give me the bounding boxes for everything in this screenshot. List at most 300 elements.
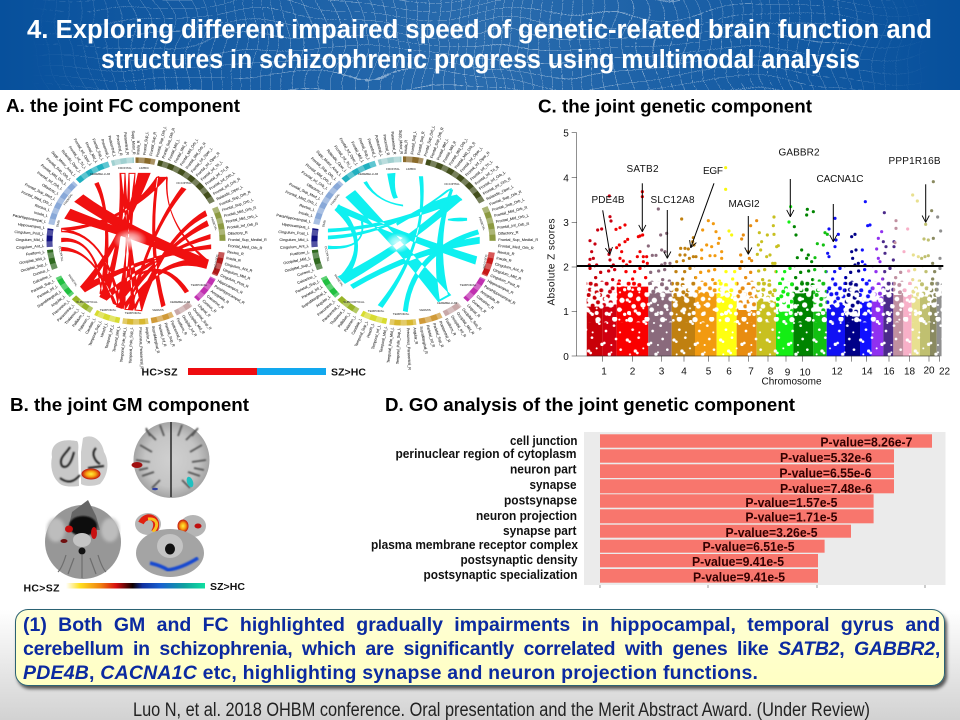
region labels left: Frontal_Mid_L [84, 142, 98, 164]
y axis ticks: 4 [563, 174, 569, 184]
region labels right: Temporal_Pole_Sup_L [396, 328, 401, 364]
region labels left: Frontal_Inf_Orb_L [36, 171, 63, 191]
gene labels: SATB2 [626, 164, 659, 175]
region labels left: Temporal_Inf_L [104, 324, 115, 349]
region labels right: Frontal_Sup_L [410, 131, 417, 155]
region labels right: Fusiform_R [444, 318, 457, 336]
region labels left: Olfactory_L [41, 183, 60, 196]
region labels left: Supp_Motor_R [131, 131, 136, 155]
region labels left: Frontal_Inf_Orb_R [227, 222, 259, 230]
red chords [62, 173, 211, 311]
GM colour bar: HC>SZ [24, 582, 60, 594]
gene arrows [603, 179, 926, 258]
region labels left: SupraMarginal_R [151, 326, 160, 354]
module names left: OCCIPITAL [58, 246, 64, 262]
region labels right: Hippocampus_L [282, 222, 310, 230]
module names right: DMN [321, 220, 327, 228]
region labels right: Occipital_Sup_R [461, 308, 482, 331]
region labels right: Paracentral_L [321, 304, 341, 323]
center glow left [113, 229, 147, 251]
module names left: CEREBELLUM [170, 300, 191, 304]
region labels right: Frontal_Mid_L [350, 141, 365, 163]
plot background [584, 432, 946, 585]
p-value labels: P-value=5.32e-6 [780, 450, 872, 465]
region labels right: Frontal_Sup_Orb_R [489, 190, 523, 207]
region labels left: Rectus_L [34, 204, 51, 212]
footer background gradient [0, 610, 960, 720]
module names right: TEMPORAL [393, 312, 410, 316]
gene labels: EGF [703, 166, 723, 177]
region labels right: Frontal_Mid_Orb_L [496, 214, 529, 224]
gene labels: SLC12A8 [650, 195, 695, 206]
region labels left: Frontal_Inf_Oper_L [73, 138, 93, 167]
region labels right: Cingulum_Ant_R [494, 262, 524, 273]
region labels right: Frontal_Sup_Med_L [288, 182, 321, 201]
region labels left: Cingulum_Post_R [220, 274, 249, 289]
region labels right: Frontal_Inf_Oper_L [338, 137, 359, 166]
region labels left: Cingulum_Mid_L [16, 238, 44, 242]
callout: conclusion [15, 609, 945, 686]
Manhattan plot [546, 128, 950, 388]
region labels left: Frontal_Mid_R [174, 141, 188, 164]
x axis ticks: 16 [883, 366, 895, 378]
region labels left: Frontal_Inf_Orb_L [209, 171, 236, 191]
region labels left: Postcentral_L [107, 135, 117, 157]
region labels right: Precentral_L [366, 138, 377, 159]
category labels: postsynaptic specialization [424, 568, 578, 582]
GO bar chart [371, 432, 946, 588]
module names right: FRONTAL [386, 167, 400, 171]
region labels right: Precuneus_Paracentral_R [406, 328, 412, 370]
slice: coronal [51, 436, 107, 487]
p-value labels: P-value=6.51e-5 [702, 539, 794, 554]
module names right: LIMBIC [406, 167, 417, 171]
region labels left: Occipital_Sup_R [192, 307, 213, 331]
region labels right: Paracentral_R [390, 131, 397, 155]
x axis ticks: 14 [861, 366, 873, 378]
region labels right: Occipital_Mid_L [283, 256, 311, 265]
module names right: PARIETAL [478, 216, 486, 231]
region labels left: Temporal_Pole_Mid_L [119, 327, 127, 362]
region labels right: Fusiform_L [290, 250, 310, 257]
region labels right: Frontal_Inf_Tri_R [474, 165, 500, 186]
region labels right: Frontal_Sup_Orb_L [491, 198, 525, 212]
brain slices [45, 422, 210, 579]
y axis ticks: 0 [563, 352, 569, 363]
region labels right: Frontal_Sup_Orb_L [423, 125, 436, 157]
slice: temporal and cerebellum [135, 513, 206, 577]
FC legend [142, 366, 366, 378]
axes [572, 133, 939, 362]
region labels left: Frontal_Med_Orb_L [21, 190, 53, 207]
region labels left: Frontal_Mid_Orb_L [40, 163, 68, 186]
region labels right: Putamen_L [343, 315, 357, 333]
region labels left: Frontal_Inf_Oper_R [195, 151, 221, 177]
module names left: TEMPORAL [191, 283, 208, 287]
region labels right: Precuneus_L [317, 299, 336, 317]
region labels left: Insula_L [34, 211, 48, 218]
module names right: CEREBELLUM [358, 172, 379, 176]
module names left: SUBCORTICAL [76, 300, 98, 304]
x axis ticks: 18 [904, 366, 915, 378]
region labels left: Temporal_Mid_L [112, 326, 121, 352]
cyan chords [328, 173, 479, 312]
region labels right: Rolandic_Oper_L [326, 149, 348, 173]
region labels left: ParaHippocampal_R [213, 284, 246, 305]
category labels: cell junction [510, 434, 578, 448]
region labels left: Temporal_Pole_Sup_L [128, 327, 134, 363]
p-value labels: P-value=1.57e-5 [745, 495, 837, 510]
category labels: plasma membrane receptor complex [371, 538, 578, 552]
heading C: C. the joint genetic component [538, 96, 812, 116]
title: 4. Exploring different impaired speed of genetic-related brain function and [27, 16, 932, 44]
p-value labels: P-value=3.26e-5 [726, 525, 818, 540]
y axis ticks: 3 [563, 218, 569, 229]
region labels left: Precuneus_Paracentral_R [138, 327, 144, 369]
region labels right: Cuneus_R [471, 299, 487, 314]
p-value labels: P-value=6.55e-6 [779, 466, 871, 480]
region labels left: Parietal_Inf_L [37, 284, 59, 299]
region labels left: Precentral_L [100, 139, 111, 159]
region labels right: Cingulum_Post_L [278, 230, 309, 236]
region labels left: Frontal_Mid_Orb_L [225, 214, 258, 224]
region labels left: Angular_L [50, 294, 66, 308]
y axis ticks: 2 [563, 262, 569, 274]
region labels right: Frontal_Sup_Orb_L [310, 157, 338, 181]
region labels right: Rectus_R [497, 250, 515, 256]
region labels left: Frontal_Sup_Orb_L [45, 157, 72, 182]
region labels right: Thalamus_L [329, 308, 346, 326]
module names right: PARIETAL [333, 274, 345, 288]
region labels left: Parietal_Inf_R [157, 324, 167, 347]
GM colour bar: SZ>HC [210, 581, 245, 593]
region labels left: Frontal_Med_Orb_R [228, 244, 263, 250]
region labels right: Olfactory_R [498, 231, 519, 236]
x axis ticks: 7 [748, 366, 754, 378]
x axis ticks: 22 [939, 366, 950, 378]
region labels right: Angular_R [412, 327, 418, 345]
region labels left: Frontal_Sup_R [149, 131, 157, 156]
region labels right: Frontal_Sup_R [417, 131, 426, 156]
threshold line [577, 263, 943, 269]
module names right: TEMPORAL [460, 283, 477, 287]
heading B: B. the joint GM component [10, 394, 249, 415]
region labels right: ParaHippocampal_L [276, 213, 311, 224]
region labels right: Hippocampus_R [487, 279, 514, 295]
region labels right: Calcarine_R [475, 295, 495, 310]
region labels left: Fusiform_R [175, 317, 188, 336]
region labels right: Olfactory_L [306, 183, 325, 196]
region labels right: Frontal_Sup_L [357, 138, 371, 161]
y axis title: Absolute Z scores [546, 218, 558, 306]
region labels left: Cingulum_Post_L [14, 230, 44, 236]
region labels left: Frontal_Inf_Tri_R [204, 165, 230, 186]
region labels left: Frontal_Inf_Tri_L [68, 145, 87, 170]
region labels right: Postcentral_R [438, 321, 451, 343]
region labels left: Frontal_Sup_Orb_L [155, 126, 167, 157]
module names right: SUB-CORT [482, 254, 488, 270]
region labels left: Frontal_Inf_Orb_R [212, 177, 241, 196]
p-value labels [692, 434, 912, 584]
region labels left: Frontal_Sup_Medial_R [228, 238, 267, 242]
callout: conclusion: cerebellum in schizophrenia, which are significantly correlated with genes like SATB2, GABBR2, [23, 638, 940, 660]
region labels right: Angular_L [315, 295, 332, 308]
gene labels: PDE4B [592, 195, 625, 206]
region labels left: Rectus_R [227, 250, 244, 256]
module ring left [50, 160, 222, 322]
region labels left: Frontal_Inf_Oper_L [190, 147, 214, 173]
module ring right [314, 159, 493, 323]
region labels left: ParaHippocampal_L [12, 213, 47, 224]
region labels right: Supp_Motor_Area_L [315, 150, 342, 177]
region labels right: Frontal_Inf_Tri_L [469, 160, 494, 181]
region labels left: Insula_R [226, 256, 242, 263]
y axis ticks [563, 128, 569, 363]
region labels right: Frontal_Mid_Orb_L [448, 138, 469, 166]
region labels left: Rolandic_Oper_L [60, 149, 82, 173]
region labels right: Frontal_Mid_Orb_L [304, 163, 333, 186]
region labels left: Cuneus_L [32, 268, 50, 277]
module names left: OCCIPITAL [176, 181, 192, 185]
callout: conclusion: (1) Both GM and FC highlighted gradually impairments in hippocampal, temporal gyrus and [23, 614, 940, 636]
region labels left: Rolandic_Oper_L [216, 185, 244, 201]
region labels left: Occipital_Mid_R [187, 311, 206, 335]
region labels right: ParaHippocampal_R [483, 285, 516, 306]
region labels left: Frontal_Mid_L [168, 139, 180, 161]
region labels right: Frontal_Med_Orb_R [498, 244, 534, 250]
region labels left: Angular_R [145, 327, 151, 344]
module names right: SUBCORTICAL [343, 300, 365, 304]
x axis ticks: 6 [726, 366, 732, 378]
category labels: neuron part [510, 462, 577, 476]
region labels left: Hippocampus_R [217, 279, 244, 295]
y axis ticks: 5 [563, 128, 569, 140]
region labels left [12, 126, 267, 369]
region labels left: Frontal_Mid_Orb_R [224, 206, 257, 218]
region labels left: Supp_Motor_Area_L [50, 150, 77, 177]
region labels right: SupraMarginal_R [419, 326, 428, 355]
region labels right: Pallidum_L [337, 311, 351, 328]
region labels right: Parietal_Inf_L [301, 285, 324, 300]
region labels right: SupraMarginal_L [301, 290, 327, 309]
module names right: CEREBELLUM [437, 301, 458, 305]
category labels [371, 434, 578, 582]
region labels right: Postcentral_L [374, 135, 384, 157]
x axis ticks [601, 366, 950, 378]
module names left: TEMPORAL [100, 308, 117, 312]
region labels right: Cingulum_Post_R [490, 274, 520, 289]
category labels: postsynaptic density [460, 553, 578, 567]
region labels left: Fusiform_L [26, 250, 45, 256]
category labels: perinuclear region of cytoplasm [396, 447, 576, 461]
region labels left: Frontal_Sup_L [143, 131, 149, 155]
x axis ticks: 10 [799, 368, 811, 378]
region labels right: Frontal_Mid_Orb_R [494, 206, 528, 218]
x axis ticks: 2 [630, 366, 636, 378]
region labels right: Temporal_Mid_L [379, 326, 388, 353]
p-value labels: P-value=1.71e-5 [745, 510, 837, 524]
p-value labels: P-value=7.48e-6 [780, 481, 872, 496]
region labels right: Rolandic_Oper_L [486, 185, 515, 201]
region labels left: Insula_R [136, 140, 141, 155]
region labels right: Frontal_Sup_Orb_R [430, 127, 445, 159]
region labels right: Rectus_L [299, 203, 316, 212]
module names right: FRONTAL [330, 192, 341, 206]
gene labels: GABBR2 [778, 148, 820, 158]
region labels right: Precentral_R [382, 134, 390, 156]
x axis ticks: 3 [659, 366, 665, 378]
region labels right: Parietal_Inf_R [425, 325, 436, 348]
region labels right: Frontal_Inf_Oper_R [465, 151, 491, 177]
region labels left: Precuneus_L [52, 299, 71, 316]
FC legend: HC>SZ [142, 366, 178, 378]
gene labels [592, 148, 941, 210]
region labels left: Frontal_Sup_Orb_L [221, 198, 254, 212]
region labels left: Hippocampus_L [18, 223, 45, 230]
region labels right: Cingulum_Mid_R [492, 268, 522, 281]
module names left: TEMPORAL [125, 311, 142, 315]
region labels left: Cingulum_Mid_R [222, 268, 251, 281]
region labels right: Frontal_Med_Orb_L [285, 190, 318, 207]
module names left: FRONTAL [63, 192, 74, 206]
module names right: TEMPORAL [368, 309, 385, 313]
region labels left: Frontal_Mid_Orb_L [179, 138, 199, 167]
p-value labels: P-value=9.41e-5 [692, 554, 784, 569]
module names left [55, 166, 219, 315]
region labels left: Paracentral_L [56, 303, 75, 322]
region labels left: Amygdala_R [210, 289, 230, 305]
region labels right: Insula_R [496, 256, 512, 263]
heading A: A. the joint FC component [6, 95, 240, 116]
category labels: synapse part [503, 524, 577, 538]
region labels right: Frontal_Inf_Orb_L [478, 170, 506, 191]
y axis ticks: 1 [563, 307, 569, 318]
region labels left: Occipital_Inf_R [181, 314, 198, 338]
region labels right: Temporal_Sup_L [354, 321, 369, 347]
header banner [0, 0, 960, 90]
region labels left: SupraMarginal_L [36, 289, 62, 309]
region labels right: Caudate_L [351, 318, 363, 335]
gene labels: PPP1R16B [888, 156, 941, 167]
module names left: CEREBELLUM [90, 172, 111, 176]
significant points [589, 168, 941, 267]
region labels left: Postcentral_R [170, 320, 182, 343]
module names left: FRONTAL [118, 166, 132, 170]
region labels right: Insula_L [298, 211, 313, 218]
x axis ticks: 9 [785, 368, 791, 378]
region labels right: Supp_Motor_R [398, 130, 403, 154]
module names right: OCCIPITAL [324, 246, 330, 262]
x axis ticks: 1 [601, 366, 607, 378]
region labels right: Insula_R [404, 140, 408, 154]
panel A right: SZ>HC chord diagram [276, 125, 539, 370]
x axis ticks: 5 [706, 366, 712, 378]
region labels right: Frontal_Mid_R [442, 140, 457, 163]
region labels right: Amygdala_R [480, 290, 500, 305]
bars [600, 434, 932, 583]
region labels left: Frontal_Sup_L [91, 138, 104, 161]
region labels right: Frontal_Mid_L [436, 138, 449, 161]
gene labels: MAGI2 [728, 199, 760, 210]
region labels right: Cuneus_L [297, 268, 315, 277]
region labels left: Occipital_Mid_L [19, 256, 46, 265]
slice: skull base [45, 500, 121, 579]
center glow right [385, 233, 411, 253]
region labels right: Frontal_Inf_Tri_L [333, 145, 353, 169]
p-value labels: P-value=8.26e-7 [820, 434, 912, 450]
gene labels: CACNA1C [816, 174, 864, 185]
region labels left: Caudate_L [85, 317, 97, 335]
region labels right: Parietal_Sup_R [432, 323, 444, 348]
region labels left: Cuneus_R [201, 299, 217, 314]
region labels left: Frontal_Sup_Med_L [24, 183, 56, 201]
module names left: VERMIS [152, 308, 164, 312]
region labels right: Heschl_L [366, 323, 375, 338]
x axis ticks: 4 [681, 366, 687, 378]
region labels right: Occipital_Mid_R [456, 311, 475, 335]
region labels left: Pallidum_L [72, 311, 85, 328]
module names right: VERMIS [419, 308, 431, 312]
region labels left: Cingulum_Ant_L [16, 244, 44, 250]
region labels right: Parietal_Sup_L [295, 279, 320, 294]
region labels right: Occipital_Sup_L [284, 262, 313, 273]
region labels right: Frontal_Inf_Orb_R [497, 222, 530, 230]
region labels right: Temporal_Pole_Mid_L [386, 327, 395, 363]
region labels left: Calcarine_L [32, 274, 52, 285]
module names right: OCCIPITAL [444, 182, 460, 186]
region labels right: Cingulum_Mid_L [279, 238, 309, 242]
region labels right: Lingual_R [466, 304, 481, 318]
module names right [321, 167, 488, 316]
region labels right: Frontal_Inf_Orb_R [482, 177, 512, 196]
title: structures in schizophrenic progress using multimodal analysis [101, 46, 860, 74]
region labels left: Putamen_L [78, 314, 91, 332]
module names left: DMN [55, 220, 61, 228]
region labels right: Occipital_Inf_R [450, 315, 467, 338]
region labels right: Calcarine_L [297, 274, 317, 285]
region labels right: Frontal_Inf_Oper_L [459, 146, 484, 173]
region labels left: Occipital_Sup_L [20, 262, 48, 273]
region labels right: Frontal_Sup_Medial_R [498, 238, 539, 242]
module names left: PARIETAL [67, 274, 79, 288]
region labels left: Frontal_Mid_Orb_R [185, 142, 207, 170]
heading D: D. GO analysis of the joint genetic component [385, 394, 795, 415]
callout: conclusion: PDE4B, CACNA1C etc, highlighting synapse and neuron projection functions. [23, 662, 758, 684]
region labels left: Precentral_R [115, 135, 123, 156]
region labels left: Thalamus_L [64, 307, 80, 325]
panel A left: HC>SZ chord diagram [12, 126, 267, 369]
region labels right: Temporal_Inf_L [371, 325, 382, 350]
region labels left: Temporal_Sup_L [88, 320, 102, 346]
title [27, 16, 932, 74]
region labels left: Lingual_R [197, 303, 211, 318]
x axis title: Chromosome [762, 376, 822, 388]
category labels: neuron projection [476, 509, 577, 523]
region labels left: Parietal_Sup_L [30, 279, 55, 294]
region labels right [276, 125, 539, 370]
region labels left: Paracentral_R [123, 132, 129, 155]
category labels: postsynapse [504, 494, 577, 508]
GM colour bar [24, 581, 245, 594]
region labels left: Frontal_Sup_Orb_R [219, 190, 252, 207]
region labels left: Heschl_L [100, 322, 109, 338]
region labels left: Calcarine_R [206, 294, 225, 310]
module names left: PARIETAL [210, 216, 218, 231]
slice: axial [132, 422, 210, 498]
module names left: SUB-CORT [213, 254, 219, 270]
category labels: synapse [530, 478, 577, 492]
region labels right: Cingulum_Ant_L [280, 244, 309, 250]
